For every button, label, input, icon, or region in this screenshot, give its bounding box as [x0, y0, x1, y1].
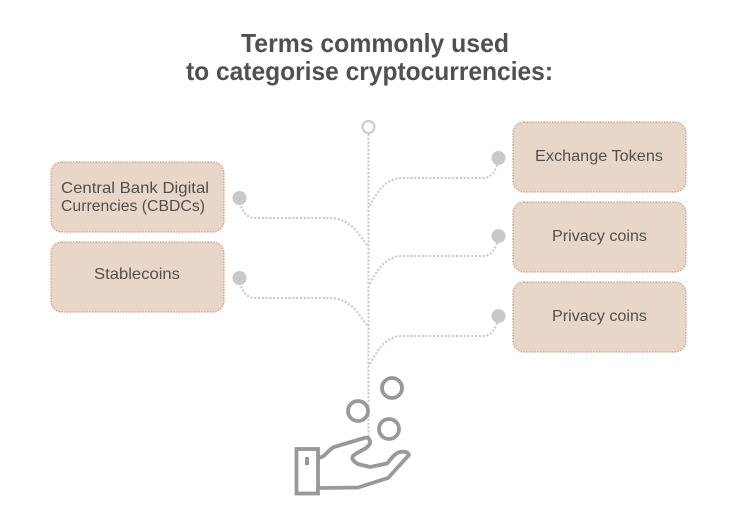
- title: Terms commonly used: [241, 28, 509, 58]
- panel: Privacy coins lower: Privacy coins: [552, 308, 647, 325]
- title: [186, 28, 553, 86]
- title: to categorise cryptocurrencies:: [186, 56, 553, 86]
- panel: Central Bank Digital Currencies: Currencies (CBDCs): [61, 198, 205, 215]
- panel: Privacy coins lower: [513, 282, 686, 352]
- panel: Stablecoins: [51, 242, 224, 312]
- panel: Exchange Tokens: [513, 122, 686, 192]
- panel: Central Bank Digital Currencies: [51, 162, 224, 232]
- tree connector lines: [241, 134, 497, 437]
- panel: Stablecoins: Stablecoins: [94, 266, 180, 283]
- panel: Privacy coins upper: [513, 202, 686, 272]
- icon: top circle node: [362, 121, 374, 133]
- panel: Exchange Tokens: Exchange Tokens: [535, 148, 663, 165]
- icon: coins and open hand: [296, 378, 409, 494]
- panel: Privacy coins upper: Privacy coins: [552, 228, 647, 245]
- panel: Central Bank Digital Currencies: Central Bank Digital: [61, 180, 209, 197]
- connector dots: [232, 151, 506, 323]
